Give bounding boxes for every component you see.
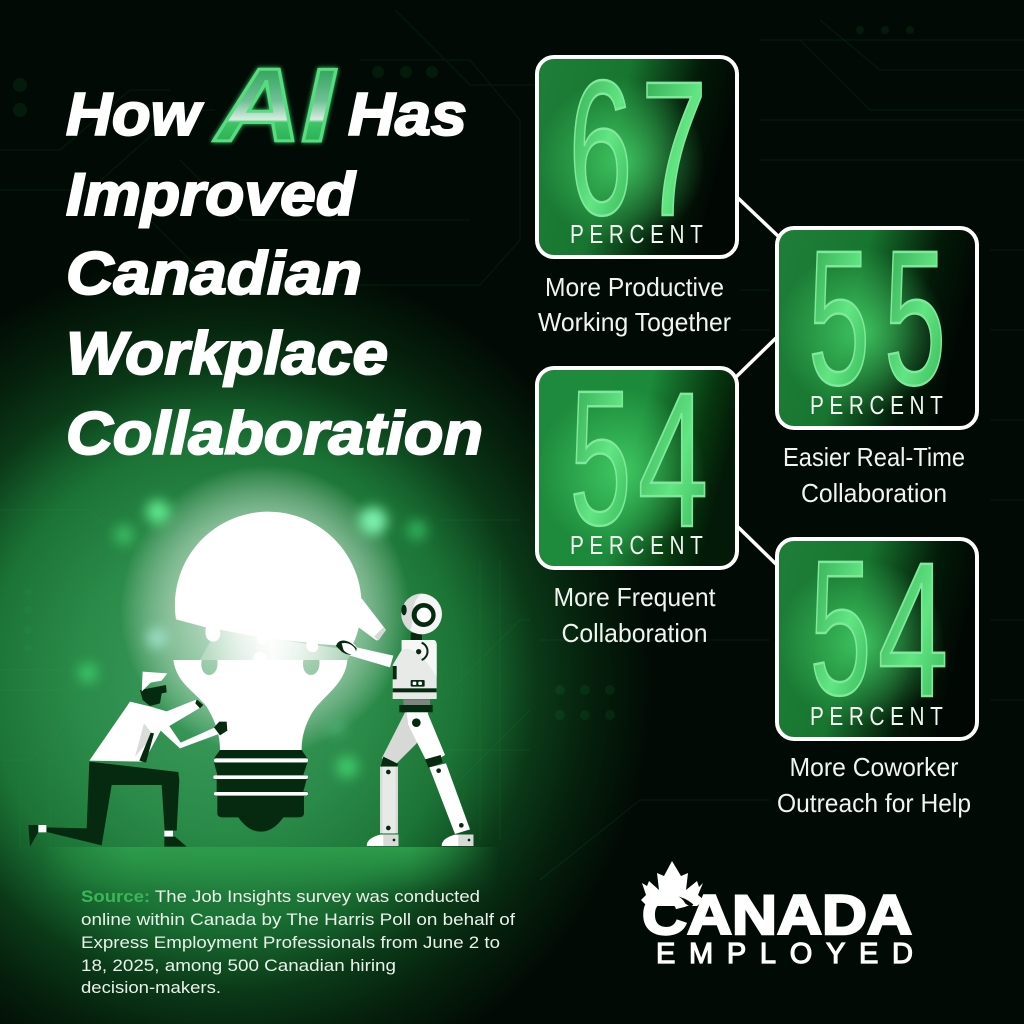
robot (336, 594, 473, 846)
caption: 54 percent outreach: More Coworker (790, 752, 959, 782)
source note: 18, 2025, among 500 Canadian hiring (81, 956, 396, 975)
caption: 55 percent: Easier Real-Time (783, 442, 965, 472)
title: Improved (66, 161, 356, 228)
illustration: bulb, man and robot (28, 512, 473, 847)
stat card: 54 percent frequent: PERCENT (570, 531, 703, 560)
caption: 55 percent (783, 442, 965, 508)
connector lines (736, 198, 778, 566)
caption: 54 percent frequent: Collaboration (562, 618, 708, 648)
stat card: 67 percent: 7 (641, 41, 707, 256)
title: How (66, 81, 204, 148)
title: Canadian (66, 240, 362, 307)
stat card: 54 percent frequent: 4 (638, 354, 708, 567)
title: Workplace (66, 320, 388, 387)
caption: 67 percent (538, 272, 731, 337)
title: Collaboration (66, 400, 483, 467)
stat card: 55 percent: 5 (808, 212, 870, 426)
caption: 67 percent: More Productive (545, 272, 724, 302)
stat card: 54 percent outreach (777, 522, 977, 739)
stat card: 54 percent frequent: 5 (570, 352, 631, 566)
caption: 54 percent frequent: More Frequent (554, 582, 716, 612)
caption: 54 percent outreach: Outreach for Help (777, 788, 971, 818)
source note: Source: The Job Insights survey was conducted (81, 887, 480, 906)
title: Has (348, 81, 467, 148)
stat card: 67 percent (537, 41, 737, 257)
title (66, 81, 483, 467)
man pushing (28, 672, 227, 847)
logo: Canada Employed: CANADA (642, 883, 912, 946)
title highlight: AI: AI (213, 48, 336, 164)
background dots (13, 26, 914, 720)
stat card: 67 percent: PERCENT (570, 220, 703, 249)
logo: Canada Employed (641, 861, 913, 970)
bulb radiance (120, 465, 410, 755)
stat card: 54 percent outreach: 4 (878, 524, 948, 737)
caption: 55 percent: Collaboration (801, 478, 947, 508)
floating light orbs (78, 500, 427, 778)
source note: decision-makers. (81, 978, 221, 997)
caption: 54 percent outreach (777, 752, 971, 818)
logo: Canada Employed: EMPLOYED (656, 938, 913, 970)
stat card: 54 percent outreach: PERCENT (810, 702, 943, 731)
caption: 54 percent frequent (554, 582, 716, 648)
icon: maple leaf (641, 861, 704, 906)
stat card: 67 percent: 6 (568, 41, 633, 255)
stat card: 55 percent (777, 212, 977, 428)
source note (81, 887, 515, 997)
source note: Express Employment Professionals from June 2 to (81, 933, 500, 952)
stat card: 54 percent frequent (537, 352, 737, 568)
light bulb (173, 512, 362, 832)
source note: online within Canada by The Harris Poll on behalf of (81, 910, 515, 929)
stat card: 55 percent: 5 (884, 212, 946, 426)
stat card: 55 percent: PERCENT (810, 391, 943, 420)
glowing ground (60, 847, 492, 892)
stat card: 54 percent outreach: 5 (810, 522, 871, 736)
caption: 67 percent: Working Together (538, 307, 731, 337)
